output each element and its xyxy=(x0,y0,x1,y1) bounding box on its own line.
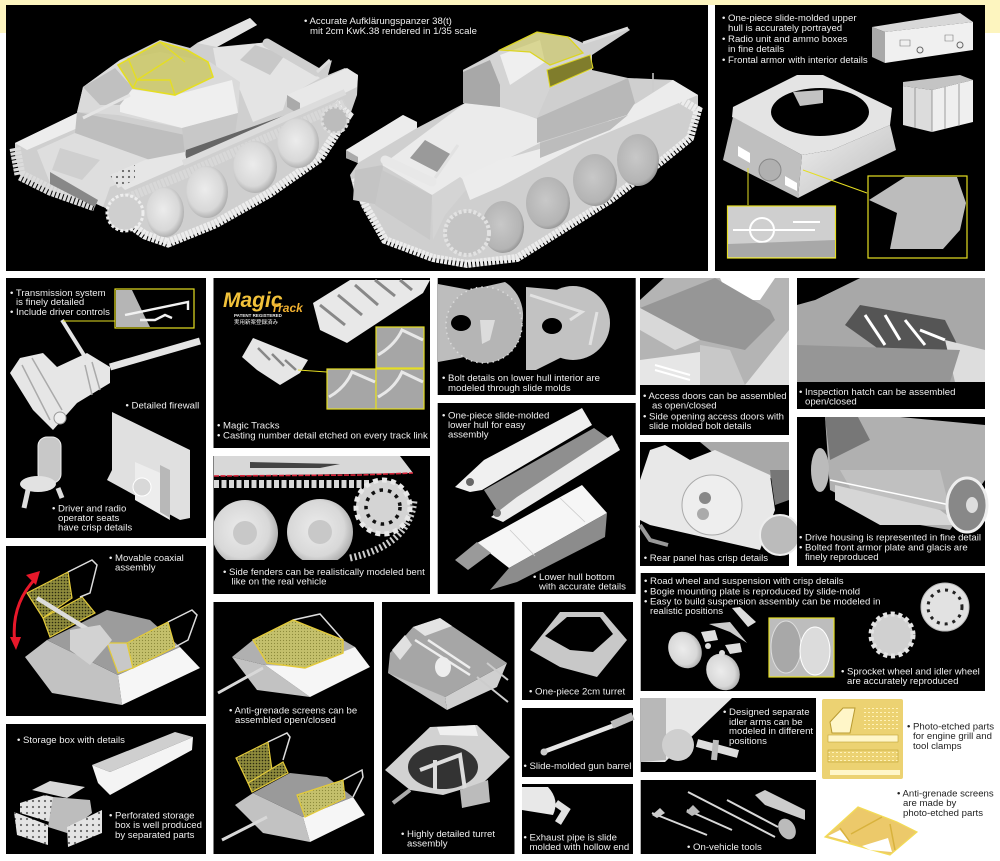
caption: seats: • Driver and radio xyxy=(52,504,126,514)
caption: road wheel: • Bogie mounting plate is reproduced by slide-mold xyxy=(644,586,860,598)
caption: anti-grenade parts: photo-etched parts xyxy=(903,808,983,819)
caption: perforated box: • Perforated storage xyxy=(109,810,194,822)
panel: drive housing xyxy=(797,417,987,566)
caption: screens xyxy=(229,706,357,726)
caption: upper hull list: • Frontal armor with interior details xyxy=(722,55,868,66)
caption: road wheel: • Easy to build suspension assembly can be modeled in xyxy=(644,596,880,608)
logo: Magic Track: Magic xyxy=(223,289,283,312)
captions: lower hull xyxy=(442,410,626,592)
caption: turret assembly: assembly xyxy=(407,838,448,850)
caption: storage box: • Storage box with details xyxy=(17,735,125,746)
caption: sprocket xyxy=(841,666,980,687)
captions: transmission: • Transmission system xyxy=(10,288,106,299)
caption: access doors: slide molded bolt details xyxy=(649,421,752,432)
barrel xyxy=(540,716,633,756)
captions: lower hull: • Lower hull bottom xyxy=(533,572,615,583)
bolt detail right xyxy=(526,286,610,370)
caption: magic tracks: • Magic Tracks xyxy=(217,420,280,432)
single track link xyxy=(242,338,308,385)
caption: sprocket: • Sprocket wheel and idler wheel xyxy=(841,666,980,678)
captions: transmission xyxy=(10,288,110,318)
turret with closed screens xyxy=(218,614,370,697)
caption: bolts: modeled through slide molds xyxy=(448,383,571,394)
caption: photo-etched: • Photo-etched parts xyxy=(907,722,994,732)
caption: photo-etched xyxy=(907,722,994,752)
caption: magic tracks: • Casting number detail etched on every track link xyxy=(217,430,428,442)
caption: seats: operator seats xyxy=(58,513,120,524)
turret with open screens xyxy=(25,560,200,705)
firewall xyxy=(107,412,190,520)
panel: road wheels and sprockets xyxy=(641,573,985,696)
caption: upper hull list: hull is accurately portrayed xyxy=(728,23,842,34)
sprocket wheel xyxy=(871,614,913,656)
caption: accurate model: mit 2cm KwK.38 rendered in 1/35 scale xyxy=(310,26,477,37)
ammo boxes xyxy=(903,75,973,132)
panel: access doors xyxy=(640,278,789,435)
callout: casting number insets xyxy=(298,327,424,409)
arrow: elevation arc xyxy=(10,571,40,650)
callout: bolted plate inset xyxy=(868,176,967,258)
tools xyxy=(652,790,805,843)
caption: anti-grenade parts xyxy=(897,788,994,819)
caption: inspection hatch: • Inspection hatch can be assembled xyxy=(799,387,955,398)
caption: upper hull list xyxy=(722,13,868,66)
caption: access doors: • Side opening access doors with xyxy=(643,412,784,422)
panel: inspection hatch xyxy=(797,278,985,409)
drive housing image xyxy=(811,417,987,532)
panel: storage box xyxy=(6,724,206,854)
caption: accurate model: • Accurate Aufklärungspanzer 38(t) xyxy=(304,16,452,27)
caption: access doors xyxy=(643,391,787,432)
panel: side fenders xyxy=(212,456,430,594)
caption: side fenders: like on the real vehicle xyxy=(232,576,326,588)
caption: photo-etched: for engine grill and xyxy=(913,731,992,742)
anti-grenade screen part xyxy=(825,807,917,855)
panel: one-piece turret xyxy=(522,602,633,700)
panel: lower hull xyxy=(438,403,636,594)
caption: idler arms: modeled in different xyxy=(729,726,813,737)
turret from below xyxy=(385,725,510,808)
caption: inspection hatch: open/closed xyxy=(805,396,857,408)
turret with open screens xyxy=(222,733,365,842)
logo: Magic Track xyxy=(223,289,304,326)
idler wheel xyxy=(921,583,969,631)
track links xyxy=(313,280,430,343)
caption: coaxial xyxy=(109,553,184,574)
caption: upper hull list: • One-piece slide-molded upper xyxy=(722,13,857,24)
caption: photo-etched: tool clamps xyxy=(913,741,962,752)
caption: side fenders: • Side fenders can be realistically modeled bent xyxy=(223,567,425,578)
captions: transmission: is finely detailed xyxy=(16,297,84,308)
turret shell xyxy=(530,612,627,677)
caption: bolts: • Bolt details on lower hull interior are xyxy=(442,373,600,384)
inspection hatch image xyxy=(797,278,985,382)
captions: transmission: • Include driver controls xyxy=(10,307,110,318)
panel: bolt details xyxy=(438,278,636,395)
logo: Magic Track: Track xyxy=(271,301,304,315)
caption: drive housing: • Drive housing is represented in fine detail xyxy=(799,532,981,544)
captions: lower hull: lower hull for easy xyxy=(448,420,526,431)
fender detail image xyxy=(212,456,414,566)
caption: side fenders xyxy=(223,567,425,588)
caption: rear panel: • Rear panel has crisp details xyxy=(644,553,768,564)
caption: screens: • Anti-grenade screens can be xyxy=(229,706,357,716)
panel: turret assembly xyxy=(382,602,514,854)
caption: road wheel: • Road wheel and suspension with crisp details xyxy=(644,576,844,587)
caption: idler arms: positions xyxy=(729,736,767,747)
caption: perforated box: by separated parts xyxy=(115,830,195,841)
closed storage box xyxy=(92,732,193,795)
captions: lower hull: with accurate details xyxy=(538,582,626,592)
caption: firewall: • Detailed firewall xyxy=(126,400,199,412)
caption: idler arms: • Designed separate xyxy=(723,707,810,718)
lower hull one-piece xyxy=(455,408,620,522)
radio unit xyxy=(872,13,973,63)
suspension parts xyxy=(662,607,756,696)
caption: accurate model xyxy=(304,16,477,37)
caption: access doors: as open/closed xyxy=(652,400,717,412)
turret from above xyxy=(388,618,508,710)
panel: rear panel xyxy=(640,442,800,566)
caption: upper hull list: in fine details xyxy=(728,44,784,55)
caption: perforated box: box is well produced xyxy=(115,820,202,831)
caption: exhaust: • Exhaust pipe is slide xyxy=(524,832,617,844)
idler arm image xyxy=(641,698,738,762)
callout: driver controls inset xyxy=(63,289,194,328)
caption: road wheel xyxy=(644,576,880,617)
caption: drive housing: finely reproduced xyxy=(805,552,879,563)
lower hull bottom xyxy=(455,485,607,590)
panel: transmission, firewall and seats xyxy=(6,278,206,538)
caption: sprocket: are accurately reproduced xyxy=(847,676,958,687)
panel: coaxial assembly xyxy=(6,546,206,716)
caption: anti-grenade parts: are made by xyxy=(903,798,957,809)
bolt detail left xyxy=(438,282,523,363)
caption: coaxial: • Movable coaxial xyxy=(109,553,184,564)
caption: magic tracks xyxy=(217,420,428,442)
caption: drive housing: • Bolted front armor plate and glacis are xyxy=(799,542,968,554)
caption: barrel: • Slide-molded gun barrel xyxy=(524,761,631,772)
panel: magic tracks xyxy=(214,278,430,448)
logo: Magic Track: PATENT REGISTERED xyxy=(234,313,283,318)
panel: two complete tank views xyxy=(6,5,708,271)
perforated box parts xyxy=(14,781,102,847)
captions: lower hull: assembly xyxy=(448,430,489,440)
caption: turret assembly xyxy=(401,829,495,850)
caption: access doors: • Access doors can be assembled xyxy=(643,391,787,402)
tank: rear three-quarter view xyxy=(346,28,698,264)
caption: idler arms xyxy=(723,707,813,747)
caption: screens: assembled open/closed xyxy=(235,715,336,726)
caption: bolts xyxy=(442,373,600,394)
panel: anti-grenade screens xyxy=(214,602,374,854)
panel: exhaust pipe xyxy=(522,784,633,854)
caption: upper hull list: • Radio unit and ammo boxes xyxy=(722,34,848,45)
caption: seats: have crisp details xyxy=(58,522,132,534)
caption: coaxial: assembly xyxy=(115,562,156,574)
panel: idler arms xyxy=(641,698,816,772)
panel: upper hull xyxy=(715,5,985,271)
wheel inset xyxy=(769,618,834,677)
caption: inspection hatch xyxy=(799,387,955,408)
tank: front three-quarter view xyxy=(15,18,358,245)
caption: idler arms: idler arms can be xyxy=(729,717,803,728)
caption: turret: • One-piece 2cm turret xyxy=(529,686,625,698)
photo-etched sheet xyxy=(822,699,903,779)
caption: perforated box xyxy=(109,810,202,841)
caption: anti-grenade parts: • Anti-grenade screens xyxy=(897,788,994,800)
panel: gun barrel xyxy=(522,708,633,777)
caption: seats xyxy=(52,504,132,534)
captions: lower hull: • One-piece slide-molded xyxy=(442,410,549,422)
caption: exhaust xyxy=(524,832,629,853)
panel: on-vehicle tools xyxy=(641,780,816,854)
caption: turret assembly: • Highly detailed turret xyxy=(401,829,495,840)
caption: exhaust: molded with hollow end xyxy=(530,842,629,853)
callout: interior inset xyxy=(728,168,867,258)
exhaust xyxy=(522,787,566,823)
hull armor xyxy=(723,75,896,198)
logo: Magic Track: 実用新案登録済み xyxy=(234,318,279,326)
driver seat xyxy=(20,437,62,508)
caption: road wheel: realistic positions xyxy=(650,606,723,617)
rear panel image xyxy=(640,442,800,555)
caption: drive housing xyxy=(799,532,981,563)
caption: tools: • On-vehicle tools xyxy=(687,842,762,853)
access door image xyxy=(640,278,789,385)
transmission assembly xyxy=(10,320,200,430)
